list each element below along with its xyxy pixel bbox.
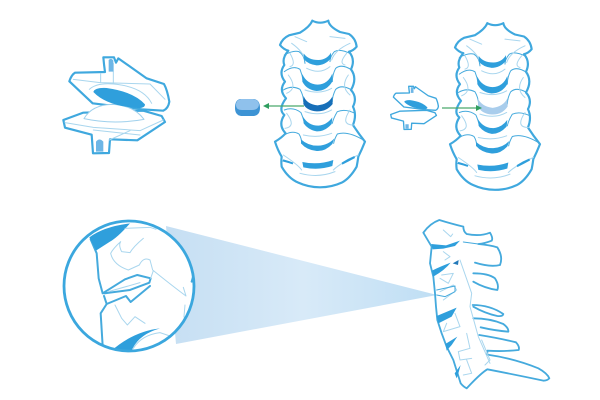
intervertebral discs (479, 55, 506, 68)
cervical spine front view: disc removed (275, 21, 365, 187)
upper keel slot (109, 59, 113, 72)
vertebrae outline (450, 23, 540, 190)
intervertebral discs (304, 53, 331, 65)
disc core (93, 88, 145, 108)
lower keel slot (96, 139, 103, 152)
cervical spine lateral view (423, 220, 549, 388)
lower plate (63, 111, 165, 153)
arrow: disc removal (263, 103, 304, 109)
artificial disc implant (63, 57, 169, 153)
vertebra detail lines (277, 37, 364, 175)
bone detail lines (440, 230, 490, 375)
spine fill (423, 220, 549, 388)
magnified view circle (64, 221, 194, 357)
cervical spine front view: implant placed (450, 23, 540, 190)
spine outline (423, 220, 549, 388)
dome (84, 104, 144, 122)
lateral discs (431, 241, 460, 249)
small implant (391, 86, 438, 130)
infographic illustration (62, 20, 550, 390)
upper plate (69, 57, 169, 111)
vertebra detail lines (452, 39, 539, 178)
removed disc fragment (235, 99, 260, 116)
vertebrae outline (275, 21, 365, 187)
arrow: implant insertion (442, 105, 482, 111)
magnification cone (166, 226, 437, 344)
